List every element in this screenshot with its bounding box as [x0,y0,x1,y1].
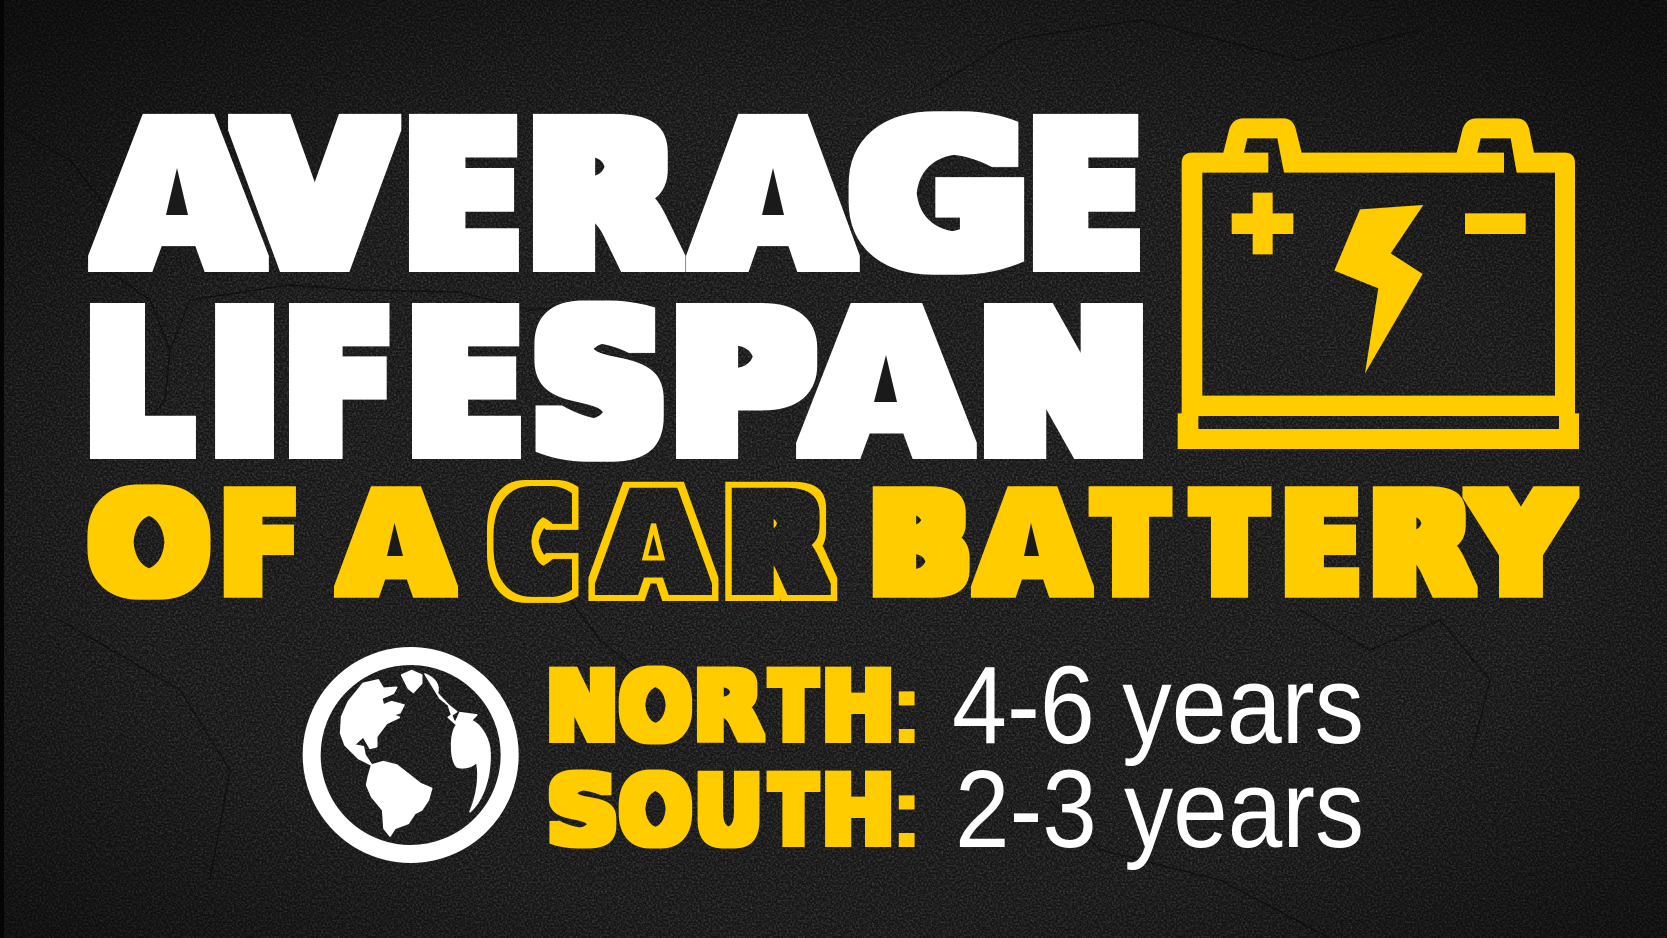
heading word: CAR (outlined) [498,467,824,622]
heading words: OF A: A [343,464,450,625]
label: SOUTH: : [888,755,925,869]
heading line: AVERAGE: G [851,84,1027,311]
label: SOUTH: H [822,758,894,866]
label: SOUTH: U [695,756,762,866]
heading words: OF A: O [90,465,208,625]
heading line: AVERAGE [100,83,1138,311]
label: NORTH: H [822,654,894,762]
label: SOUTH: O [620,757,691,866]
letter counters in the letter A [166,168,1039,558]
heading line: LIFESPAN: F [288,274,389,497]
heading line: AVERAGE: V [240,83,389,310]
icon: minus sign [1465,213,1526,234]
heading word: CAR (outlined): R [730,467,824,621]
heading word: CAR (outlined): A [604,467,703,621]
heading line: AVERAGE: A [698,83,848,310]
heading line: LIFESPAN [89,272,1149,497]
heading word: BATTERY [870,464,1571,626]
heading line: LIFESPAN: N [978,272,1149,497]
label: NORTH: R [694,652,763,762]
heading word: BATTERY: B [870,465,969,625]
heading line: LIFESPAN: S [534,272,664,496]
heading word: BATTERY: Y [1471,464,1571,625]
heading words: OF A [90,464,450,625]
title [89,83,1571,626]
value: north lifespan: 4-6 years [952,644,1364,767]
heading word: BATTERY: R [1370,464,1471,625]
heading line: AVERAGE: E [1032,83,1138,310]
label: NORTH: T [771,653,816,762]
heading line: LIFESPAN: E [410,273,520,497]
label: SOUTH: S [547,756,619,865]
heading word: BATTERY: E [1284,465,1358,626]
heading line: AVERAGE: A [100,83,257,310]
heading word: BATTERY: T [1098,465,1163,626]
heading line: AVERAGE: E [407,85,518,311]
label: NORTH: O [620,653,691,762]
heading line: AVERAGE: R [528,83,676,310]
heading word: BATTERY: A [980,466,1085,625]
label: SOUTH [547,755,925,869]
label: NORTH: : [888,651,925,765]
icon: car battery [1178,118,1579,449]
heading words: OF A: F [224,464,295,625]
label: SOUTH: T [771,757,816,866]
heading word: BATTERY: T [1197,465,1262,626]
value: south lifespan: 2-3 years [955,748,1364,871]
heading line: LIFESPAN: A [808,273,965,497]
label: NORTH [546,651,925,765]
label: NORTH: N [546,654,618,762]
icon: plus sign [1232,193,1293,254]
icon: lightning bolt [1334,205,1423,373]
heading line: LIFESPAN: L [89,274,187,497]
heading word: CAR (outlined): C [498,468,569,622]
heading line: LIFESPAN: P [671,274,812,497]
icon: globe [312,656,510,854]
heading line: LIFESPAN: I [212,273,277,497]
